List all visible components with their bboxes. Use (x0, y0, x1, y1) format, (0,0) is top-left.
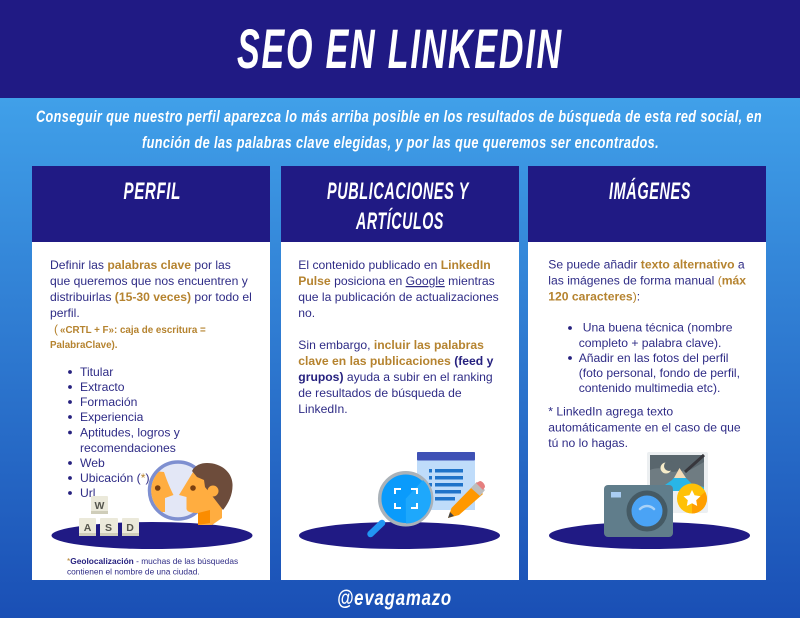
text block: imágenes intro (548, 258, 746, 304)
list: perfil fields: Web (80, 456, 105, 470)
intro text (36, 108, 762, 152)
list: imágenes tips: (foto personal, fondo de perfil, (579, 366, 740, 380)
text block: publicaciones paragraph 1: Pulse posiciona en Google mientras (298, 274, 495, 288)
panel: imágenes (528, 166, 766, 580)
panel header: publicaciones (281, 166, 519, 242)
text block: perfil intro: perfil. (50, 306, 80, 320)
text block: imágenes note: automáticamente en el caso de que (548, 421, 741, 435)
list: imágenes tips (568, 321, 740, 395)
text block: publicaciones paragraph 2: grupos) ayuda a subir en el ranking (298, 370, 493, 384)
panel: perfil (32, 166, 270, 580)
text block: publicaciones paragraph 2: LinkedIn. (298, 402, 348, 416)
icon: W key: W (95, 500, 105, 512)
illustration: keyboard and profile faces (52, 462, 252, 549)
icon: S key (100, 518, 118, 536)
icon: S key: S (105, 522, 112, 534)
text block: publicaciones paragraph 2: de resultados de búsqueda de (298, 386, 462, 400)
icon: A key: A (84, 522, 92, 534)
list: perfil fields: Titular (80, 365, 113, 379)
text block: publicaciones paragraph 1: no. (298, 306, 315, 320)
panel header: imágenes: IMÁGENES (609, 177, 691, 205)
icon: W key (91, 496, 108, 514)
text block: publicaciones paragraph 2 (298, 338, 494, 416)
text block: imágenes intro: las imágenes de forma manual (máx (548, 274, 746, 288)
icon: D key (122, 518, 139, 536)
icon: mirror ring (150, 462, 206, 519)
list: imágenes tips: contenido multimedia etc). (579, 381, 720, 395)
footnote: geolocalización: *Geolocalización - muchas de las búsquedas (67, 556, 238, 566)
text block: imágenes note: tú no lo hagas. (548, 436, 628, 450)
footer handle: @evagamazo (337, 587, 452, 610)
icon: star badge (677, 484, 707, 514)
icon: pencil (448, 481, 485, 518)
text block: publicaciones paragraph 1: que la publicación de actualizaciones (298, 290, 499, 304)
text block: perfil intro: PalabraClave). (50, 340, 118, 351)
list: perfil fields: Ubicación (*) (80, 471, 150, 485)
text block: imágenes intro: Se puede añadir texto alternativo a (548, 258, 745, 272)
text block: imágenes note: * LinkedIn agrega texto (548, 405, 673, 419)
list: imágenes tips: completo + palabra clave). (579, 336, 721, 350)
text block: perfil intro: «CRTL + F»: caja de escritura = (60, 325, 206, 336)
text block: publicaciones paragraph 2: clave en las publicaciones (feed y (298, 354, 494, 368)
text block: publicaciones paragraph 1 (298, 258, 499, 320)
panel header: imágenes (528, 166, 766, 242)
panel header: perfil (32, 166, 270, 242)
title banner (0, 0, 800, 98)
panel header: publicaciones: PUBLICACIONES Y (327, 178, 470, 205)
text block: perfil intro: que queremos que nos encuentren y (50, 274, 249, 288)
list: perfil fields: Formación (80, 395, 137, 409)
panel header: perfil: PERFIL (124, 178, 181, 205)
text block: publicaciones paragraph 1: El contenido publicado en LinkedIn (298, 258, 491, 272)
icon: A key (79, 518, 96, 536)
illustration: magnifier and document (299, 452, 500, 549)
footnote: geolocalización (67, 556, 238, 576)
icon: magnifier lens (380, 473, 432, 525)
icon: left face (151, 472, 174, 512)
illustration: camera and photo (549, 452, 750, 549)
text block: imágenes intro: 120 caracteres): (548, 290, 640, 304)
icon: magnifier handle (370, 523, 382, 534)
list: imágenes tips: Una buena técnica (nombre (583, 321, 733, 335)
text block: perfil intro: ( (54, 322, 58, 336)
list: imágenes tips: Añadir en las fotos del perfil (579, 351, 729, 365)
icon: photo (647, 452, 708, 513)
text block: perfil intro: Definir las palabras clave por las (50, 258, 231, 272)
icon: D key: D (126, 522, 134, 534)
list: perfil fields: Extracto (80, 380, 125, 394)
text block: publicaciones paragraph 2: Sin embargo, incluir las palabras (298, 338, 484, 352)
text block: perfil intro (50, 258, 252, 351)
icon: document (417, 452, 475, 510)
list: perfil fields: Aptitudes, logros y (80, 426, 181, 440)
list: perfil fields: recomendaciones (80, 441, 176, 455)
list: perfil fields: Experiencia (80, 410, 144, 424)
text block: perfil intro: distribuirlas (15-30 veces) por todo el (50, 290, 252, 304)
footnote: geolocalización: contienen el nombre de una ciudad. (67, 566, 200, 576)
panel header: publicaciones: ARTÍCULOS (355, 207, 444, 235)
text block: imágenes note (548, 405, 741, 450)
intro text: función de las palabras clave elegidas, y por las que queremos ser encontrados. (142, 134, 659, 152)
list: perfil fields: Url (80, 486, 96, 500)
icon: right profile head (179, 472, 222, 525)
title: SEO EN LINKEDIN (237, 17, 563, 80)
list: perfil fields (68, 365, 181, 500)
panel: publicaciones y artículos (281, 166, 519, 580)
icon: camera (604, 485, 673, 537)
